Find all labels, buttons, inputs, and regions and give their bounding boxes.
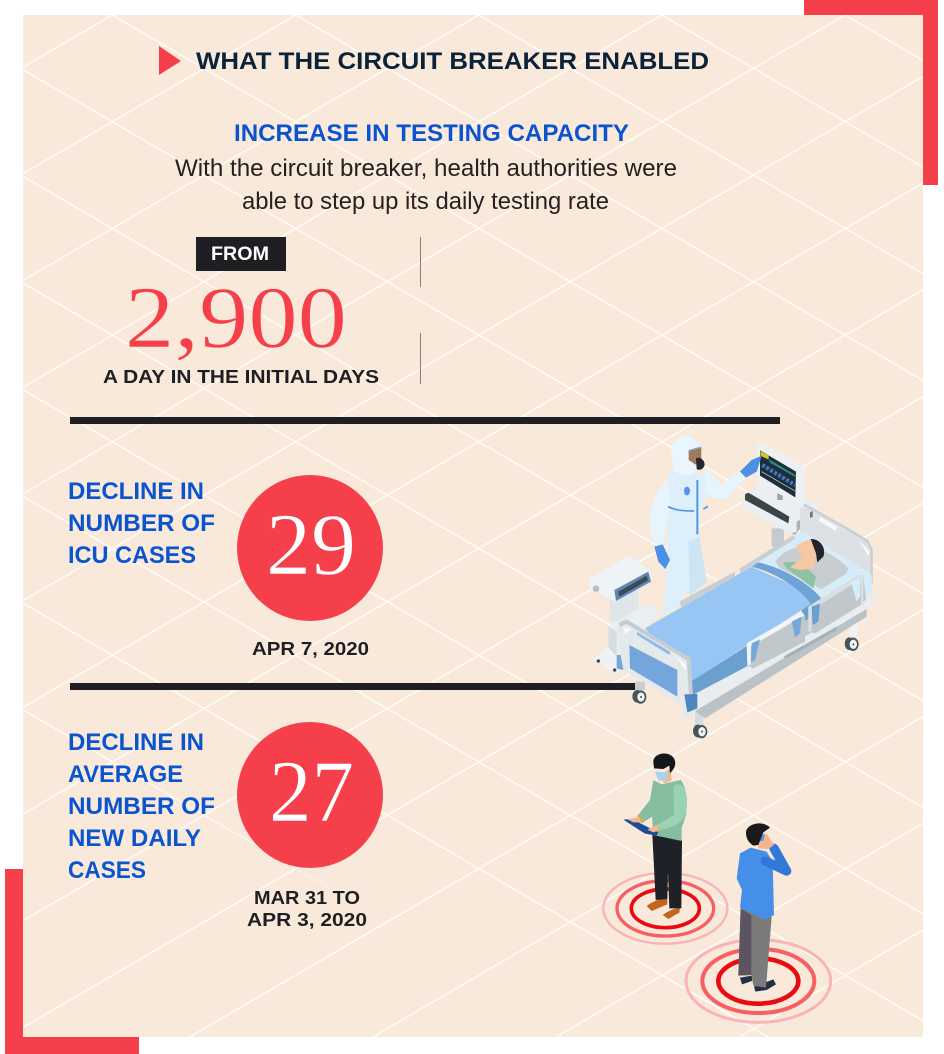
suit shading [688,537,707,595]
number: 2,900: 2,900 [125,270,347,367]
sweater sleeve [658,784,687,830]
patient [783,539,824,588]
date range: mar 31 to apr 3 [247,888,367,930]
heading: new daily cases: NEW DAILY [68,825,201,852]
illustration: hospital bed with patient and medic [590,436,873,738]
text block: testing description: With the circuit breaker, health authorities were [175,155,677,182]
hair [746,823,770,846]
bed footboard [617,619,697,718]
mask [655,772,668,781]
text block: testing description [175,155,677,215]
near side rail: head [808,575,863,633]
caption: a day in the initial days: A DAY IN THE INITIAL DAYS [103,366,379,387]
medic in protective suit [649,436,762,616]
stat circle: 29 [237,475,383,621]
bed wheels [632,637,859,738]
blue gloves [740,456,762,478]
stat circle: 27 [237,722,383,868]
neck [659,768,672,784]
heading: ICU cases: NUMBER OF [68,510,215,537]
red rings: person two [686,940,831,1022]
date: apr 7: APR 7, 2020 [252,639,369,659]
shoes [647,899,667,911]
mattress [645,562,821,696]
icon: title arrow [159,46,181,75]
bedside console [742,485,819,547]
heading: ICU cases: ICU CASES [68,542,196,569]
date range: mar 31 to apr 3: MAR 31 TO [254,888,360,908]
sweater [638,780,687,841]
suit right arm [705,468,746,499]
heading: ICU cases: DECLINE IN [68,478,204,505]
visor [689,448,701,465]
heading: new daily cases: CASES [68,857,146,884]
bed headboard [800,504,872,583]
heading: testing capacity: INCREASE IN TESTING CAPACITY [234,120,629,147]
suit left arm [649,480,672,546]
heading: new daily cases: DECLINE IN [68,729,204,756]
suit body and legs [663,472,708,616]
section rule [70,417,780,424]
near side rail: foot [747,612,805,668]
rear side rail [740,535,795,573]
trousers [652,835,682,908]
bed pillow [775,547,848,589]
person on phone [737,823,787,992]
illustration: two people distancing [603,754,831,1022]
corner bracket: top right [804,0,938,185]
shirt [737,848,774,920]
bed sheet area [750,532,872,597]
label: from: FROM [211,244,269,265]
section rule [70,683,642,690]
text block: testing description: able to step up its daily testing rate [242,188,609,215]
bed side panel [748,575,866,668]
tablet [623,819,658,836]
heading: ICU cases [68,478,215,569]
hood [671,436,702,475]
person with tablet [623,754,687,919]
heading: new daily cases: AVERAGE [68,761,183,788]
red rings: person one [603,873,727,944]
heading: new daily cases: NUMBER OF [68,793,215,820]
shirt arm [765,848,787,871]
patient monitor [757,442,804,504]
title: WHAT THE CIRCUIT BREAKER ENABLED [196,48,709,75]
heading: new daily cases [68,729,215,884]
face and hand [758,833,774,849]
stat circle: 27: 27 [269,744,354,841]
centre divider [420,237,421,384]
respirator [696,458,705,470]
label: from [196,237,286,271]
date range: mar 31 to apr 3: APR 3, 2020 [247,910,367,930]
ventilator cart [590,556,662,676]
hair [653,754,675,773]
shoes [740,976,752,984]
trousers [738,908,772,988]
bed base [692,596,873,727]
stat circle: 29: 29 [266,497,356,594]
far side foot rail [679,572,735,608]
corner bracket: bottom left [5,869,139,1054]
